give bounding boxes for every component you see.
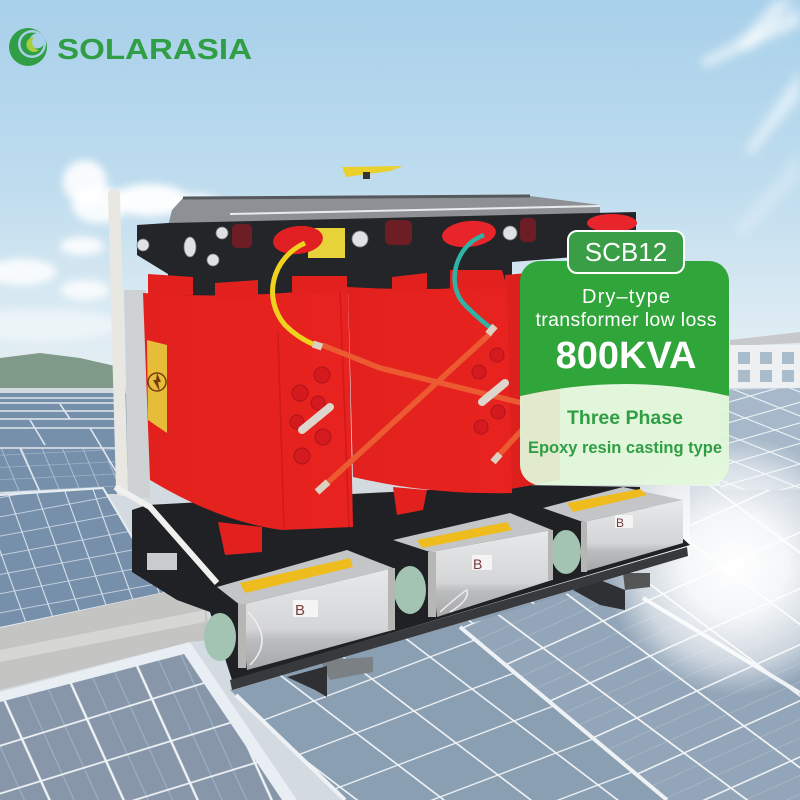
- transformer: white terminal bolts: [137, 226, 517, 266]
- transformer: yellow cable: [273, 243, 315, 345]
- transformer: terminal bolts: [290, 348, 505, 464]
- transformer: bus bar lugs: [313, 326, 500, 492]
- transformer: red insulator centre: [441, 218, 497, 250]
- feet: [287, 573, 650, 697]
- background: building: [730, 332, 800, 387]
- panels: bottom centre modules: [230, 556, 800, 800]
- fan 2: B: [473, 556, 482, 572]
- transformer: dark red insulators: [232, 218, 536, 248]
- background: sky: [0, 0, 800, 400]
- panels: module rails: [236, 598, 800, 800]
- fan 1: B: [295, 602, 305, 619]
- transformer: top plate: [168, 196, 600, 226]
- panels: right mid modules: [690, 486, 800, 640]
- background: clouds: [0, 160, 221, 341]
- transformer: warning label: [147, 340, 167, 433]
- transformer: red insulator left: [272, 223, 324, 257]
- transformer: middle coil: [348, 285, 512, 493]
- panels: bottom left module: [0, 642, 297, 800]
- background: sun rays: [700, 0, 800, 235]
- logo: [9, 28, 252, 66]
- logo: wordmark: SOLARASIA: [57, 34, 252, 66]
- card: casting type text: Epoxy resin casting type: [528, 439, 722, 457]
- card: model tag: SCB12: [585, 237, 667, 267]
- transformer: silver frame post: [124, 290, 150, 498]
- transformer: left coil: [143, 287, 353, 530]
- card: subtitle line 2: transformer low loss: [536, 309, 717, 331]
- fan mounting bar: [230, 547, 688, 690]
- panels: bottom right modules: [460, 556, 800, 800]
- solar panels: ground: [0, 388, 800, 800]
- card: subtitle line 1: Dry–type: [582, 286, 670, 308]
- transformer: top clamp blocks: [148, 270, 507, 300]
- transformer: nameplate: [308, 228, 345, 258]
- transformer: red insulator right: [587, 214, 637, 232]
- fan 1: [204, 550, 395, 670]
- transformer: white pipe frame: [114, 195, 122, 490]
- panels: concrete walkway: [0, 592, 210, 690]
- card: lower light panel: [520, 384, 729, 485]
- transformer: top yoke: [137, 212, 636, 296]
- background: sunlight glare: [605, 435, 800, 695]
- card: power rating: 800KVA: [556, 335, 696, 377]
- transformer: left stub: [218, 522, 262, 555]
- panels: near left module: [0, 488, 165, 628]
- transformer: teal cable: [455, 235, 491, 328]
- transformer: lifting lug: [342, 166, 403, 179]
- background: distant hills: [0, 353, 115, 392]
- card: phase text: Three Phase: [567, 407, 683, 429]
- logo: swirl icon: [9, 28, 47, 66]
- card: model tag: [568, 231, 684, 273]
- fan 3: [543, 487, 683, 574]
- transformer: [114, 166, 690, 680]
- fan 3: B: [616, 516, 624, 530]
- transformer: middle stub: [393, 487, 427, 515]
- panels: far right rows: [720, 388, 800, 490]
- product card: [520, 231, 729, 485]
- transformer: left coil fold line: [278, 290, 349, 530]
- transformer: right coil: [505, 270, 560, 490]
- transformer: orange bus bars: [322, 333, 522, 486]
- panels: far left rows: [0, 393, 140, 494]
- card: upper green panel: [520, 261, 729, 396]
- transformer: white rail: [115, 487, 217, 583]
- transformer: link plates: [302, 383, 505, 430]
- fan 2: [393, 513, 553, 617]
- transformer: base cooling fins: [147, 553, 177, 570]
- transformer: base frame: [132, 485, 690, 680]
